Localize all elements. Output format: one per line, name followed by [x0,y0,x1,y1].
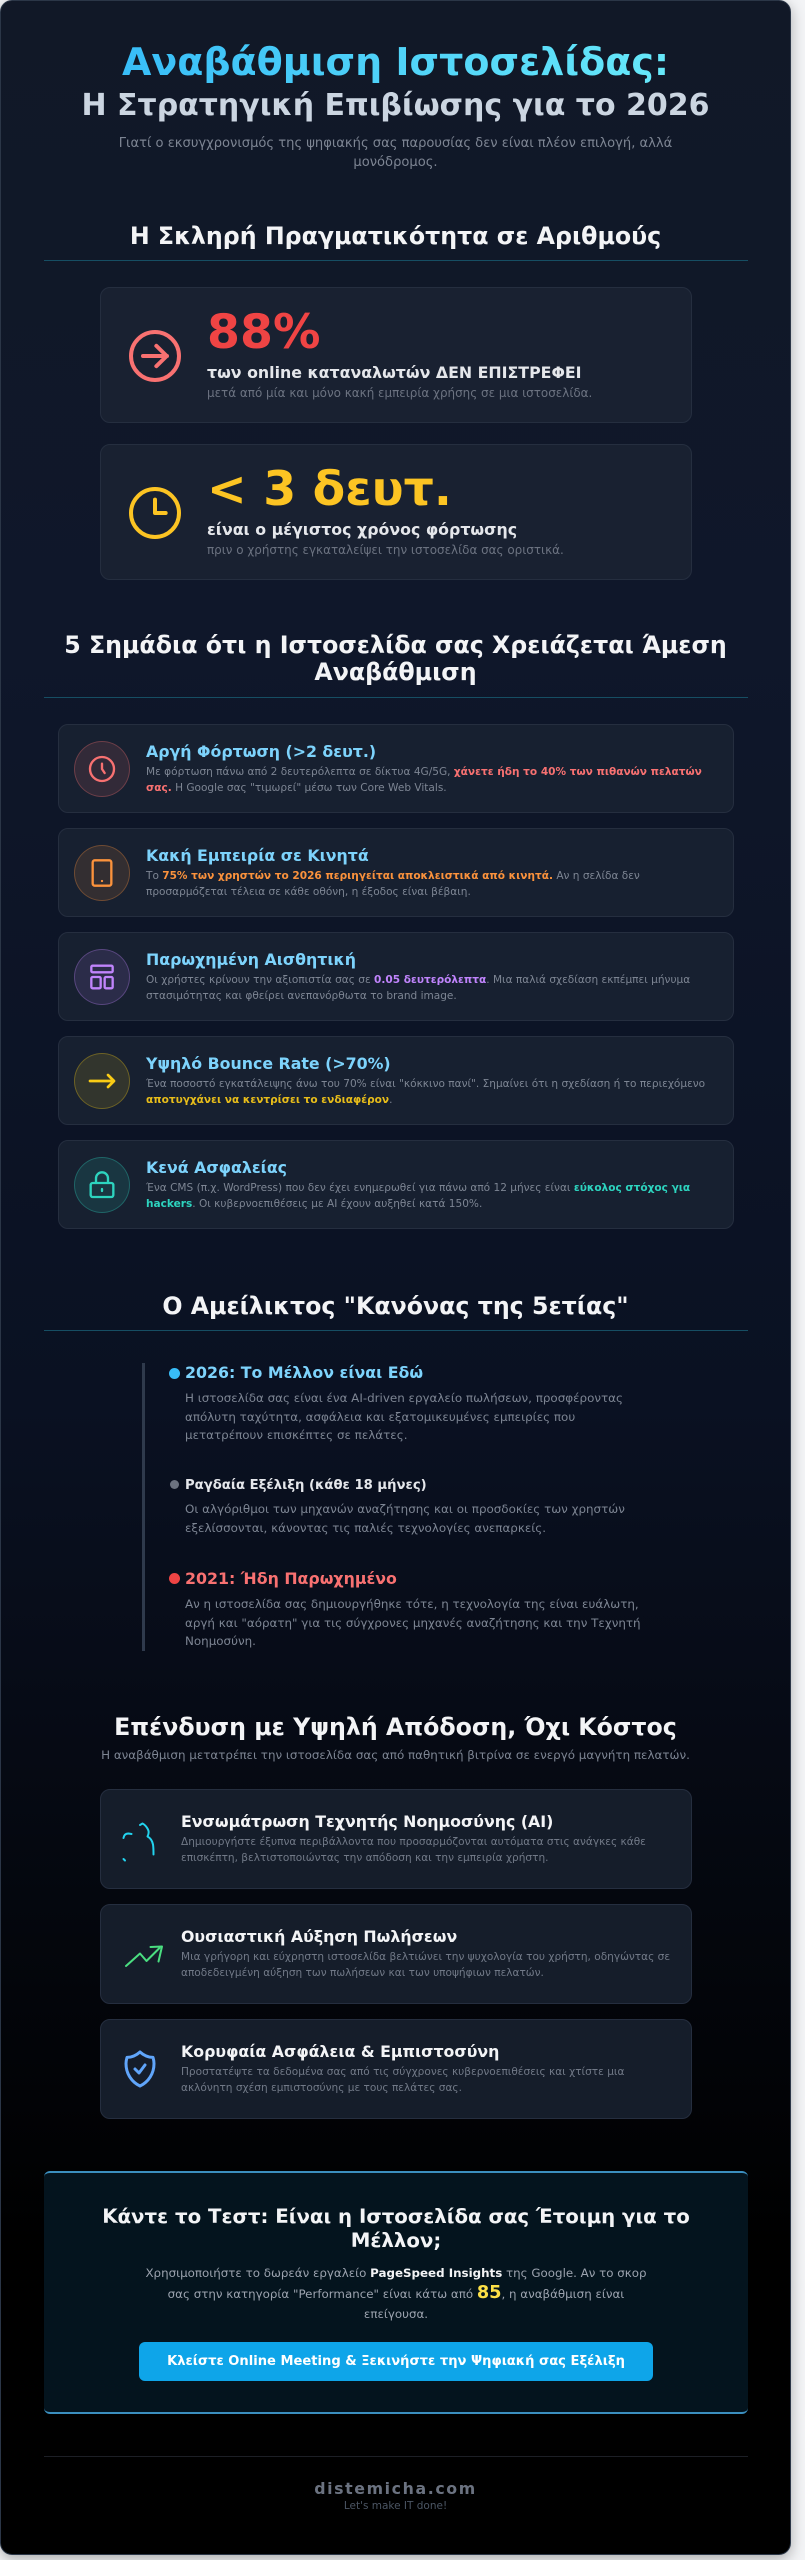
benefit text [181,1951,670,1979]
benefit text: Δημιουργήστε έξυπνα περιβάλλοντα που προσαρμόζονται αυτόματα στις ανάγκες κάθε [181,1836,646,1848]
sign text [146,870,640,898]
panel: benefit security [100,2019,692,2118]
footer brand: distemicha.com [314,2479,477,2498]
benefit text: επισκέπτη, βελτιστοποιώντας την απόδοση και την εμπειρία χρήστη. [181,1852,548,1864]
timeline title 2021: 2021: Ήδη Παρωχημένο [185,1569,397,1588]
stat number: 88% [207,305,320,360]
sign text: Με φόρτωση πάνω από 2 δευτερόλεπτα σε δίκτυα 4G/5G, χάνετε ήδη το 40% των πιθανών πελατών [146,766,702,778]
timeline text 2021: Νοημοσύνη. [185,1634,256,1648]
investment subheading: Η αναβάθμιση μετατρέπει την ιστοσελίδα σας από παθητική βιτρίνα σε ενεργό μαγνήτη πελατών. [101,1748,690,1762]
panel: stat 3 seconds [100,444,692,580]
benefit title: Κορυφαία Ασφάλεια & Εμπιστοσύνη [181,2042,499,2061]
stat note: μετά από μία και μόνο κακή εμπειρία χρήσης σε μια ιστοσελίδα. [207,386,592,400]
CTA text: επείγουσα. [364,2307,428,2321]
icon: clock [74,741,130,797]
sign text: αποτυγχάνει να κεντρίσει το ενδιαφέρον. [146,1094,392,1106]
stat label: των online καταναλωτών ΔΕΝ ΕΠΙΣΤΡΕΦΕΙ [207,363,582,382]
timeline text 2021 [185,1597,641,1648]
heading: hard reality: Η Σκληρή Πραγματικότητα σε Αριθμούς [130,222,661,250]
heading: investment: Επένδυση με Υψηλή Απόδοση, Όχι Κόστος [114,1713,677,1741]
sign title: Υψηλό Bounce Rate (>70%) [146,1054,391,1073]
sign text [146,766,702,794]
panel: benefit AI [100,1789,692,1888]
sign text [146,1182,690,1210]
icon: lock [74,1157,130,1213]
icon: phone [74,845,130,901]
heading: five signs: Αναβάθμιση [314,658,477,686]
sign text: Ένα CMS (π.χ. WordPress) που δεν έχει ενημερωθεί για πάνω από 12 μήνες είναι εύκολος στόχος για [146,1182,690,1194]
CTA button: Κλείστε Online Meeting & Ξεκινήστε την Ψηφιακή σας Εξέλιξη [167,2354,625,2369]
benefit title: Ενσωμάτρωση Τεχνητής Νοημοσύνης (AI) [181,1812,553,1831]
panel: benefit sales [100,1904,692,2004]
icon: layout [74,949,130,1005]
timeline title evolution: Ραγδαία Εξέλιξη (κάθε 18 μήνες) [185,1478,427,1493]
panel: sign bounce rate [58,1036,734,1124]
tagline: Γιατί ο εκσυγχρονισμός της ψηφιακής σας παρουσίας δεν είναι πλέον επιλογή, αλλά [119,136,672,151]
timeline title 2026: 2026: Το Μέλλον είναι Εδώ [185,1363,423,1382]
sign title: Παρωχημένη Αισθητική [146,950,356,969]
timeline [142,1363,641,1651]
footer tagline: Let's make IT done! [344,2500,447,2512]
timeline text evolution: εξελίσσονται, κάνοντας τις παλιές τεχνολογίες ανεπαρκείς. [185,1521,546,1535]
dot 2021 [169,1573,180,1584]
subtitle: Η Στρατηγική Επιβίωσης για το 2026 [82,88,710,123]
benefit text [181,2066,624,2094]
panel: stat 88% [100,287,692,423]
sign text: στασιμότητας και φθείρει ανεπανόρθωτα το brand image. [146,990,457,1002]
CTA text [145,2266,647,2321]
sign text [146,1078,705,1106]
stat label: είναι ο μέγιστος χρόνος φόρτωσης [207,520,517,539]
stat note: πριν ο χρήστης εγκαταλείψει την ιστοσελίδα σας οριστικά. [207,543,564,557]
panel: sign outdated look [58,932,734,1020]
benefit text: ακλόνητη σχέση εμπιστοσύνης με τους πελάτες σας. [181,2082,462,2094]
sign text: σας. Η Google σας "τιμωρεί" μέσω των Core Web Vitals. [146,782,447,794]
icon: trending chart [125,1946,163,1967]
timeline text 2021: αργή και "αόρατη" για τις σύγχρονες μηχανές αναζήτησης και την Τεχνητή [185,1616,641,1630]
timeline text evolution: Οι αλγόριθμοι των μηχανών αναζήτησης και οι προσδοκίες των χρηστών [185,1502,625,1516]
timeline text 2026: Η ιστοσελίδα σας είναι ένα AI-driven εργαλείο πωλήσεων, προσφέροντας [185,1391,623,1405]
timeline text 2026 [185,1391,623,1442]
CTA text: Χρησιμοποιήστε το δωρεάν εργαλείο PageSpeed Insights της Google. Αν το σκορ [145,2266,647,2280]
tagline: μονόδρομος. [353,155,438,170]
heading: five signs: 5 Σημάδια ότι η Ιστοσελίδα σας Χρειάζεται Άμεση [64,631,727,659]
dot evolution [170,1480,179,1489]
title: Αναβάθμιση Ιστοσελίδας: [122,40,669,84]
CTA heading: Μέλλον; [351,2228,441,2252]
sign title: Κακή Εμπειρία σε Κινητά [146,846,369,865]
panel: sign slow loading [58,724,734,812]
benefit text: Προστατέψτε τα δεδομένα σας από τις σύγχρονες κυβερνοεπιθέσεις και χτίστε μια [181,2066,624,2078]
tagline [119,136,672,170]
CTA heading: Κάντε το Τεστ: Είναι η Ιστοσελίδα σας Έτοιμη για το [102,2205,690,2228]
icon: clock [129,487,181,539]
dot 2026 [169,1368,180,1379]
icon: arrow in circle [129,330,181,382]
CTA heading [102,2205,690,2252]
icon: shield check [124,2050,156,2088]
sign text: Οι χρήστες κρίνουν την αξιοπιστία σας σε 0.05 δευτερόλεπτα. Μια παλιά σχεδίαση εκπέμπει μήνυμα [146,974,690,986]
timeline axis [142,1363,145,1651]
benefit text: αποδεδειγμένη αύξηση των πωλήσεων και των υποψήφιων πελατών. [181,1967,544,1979]
sign text: Ένα ποσοστό εγκατάλειψης άνω του 70% είναι "κόκκινο πανί". Σημαίνει ότι η σχεδίαση ή το περιεχόμενο [146,1078,705,1090]
sign title: Αργή Φόρτωση (>2 δευτ.) [146,742,376,761]
CTA text: σας στην κατηγορία "Performance" είναι κάτω από 85, η αναβάθμιση είναι [168,2283,624,2303]
sign title: Κενά Ασφαλείας [146,1158,287,1177]
timeline text 2026: απόλυτη ταχύτητα, ασφάλεια και εξατομικευμένες εμπειρίες που [185,1410,575,1424]
timeline text 2021: Αν η ιστοσελίδα σας δημιουργήθηκε τότε, η τεχνολογία της είναι ευάλωτη, [185,1597,639,1611]
benefit text [181,1836,646,1864]
panel: sign security [58,1140,734,1228]
stat number: < 3 δευτ. [207,462,452,517]
sign text: προσαρμόζεται τέλεια σε κάθε οθόνη, η έξοδος είναι βέβαιη. [146,886,471,898]
heading: five signs [64,631,727,686]
sign text [146,974,690,1002]
panel: sign mobile [58,828,734,916]
benefit text: Μια γρήγορη και εύχρηστη ιστοσελίδα βελτιώνει την ψυχολογία του χρήστη, οδηγώντας σε [181,1951,670,1963]
panel: call to action [44,2171,748,2414]
icon: arrow [74,1053,130,1109]
timeline text 2026: μετατρέπουν επισκέπτες σε πελάτες. [185,1428,408,1442]
CTA button [139,2342,653,2381]
benefit title: Ουσιαστική Αύξηση Πωλήσεων [181,1927,457,1946]
timeline text evolution [185,1502,625,1535]
heading: five year rule: Ο Αμείλικτος "Κανόνας της 5ετίας" [162,1292,629,1320]
sign text: hackers. Οι κυβερνοεπιθέσεις με AI έχουν αυξηθεί κατά 150%. [146,1198,482,1210]
icon: AI sparkle [122,1822,154,1862]
sign text: Το 75% των χρηστών το 2026 περιηγείται αποκλειστικά από κινητά. Αν η σελίδα δεν [146,870,640,882]
